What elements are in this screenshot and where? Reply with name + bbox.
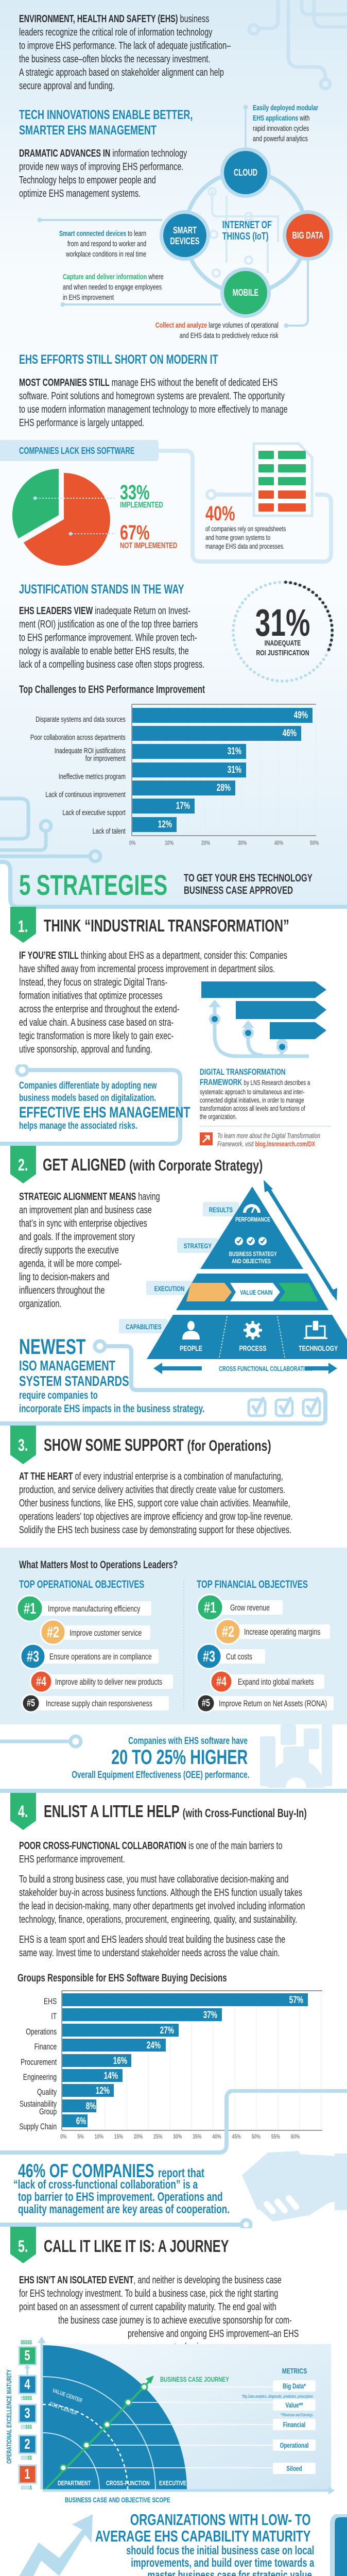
intro text: secure approval and funding.	[19, 80, 115, 92]
text: section 1: ed value chain. A business case based on stra-	[19, 1017, 173, 1028]
text: MOBILE	[233, 287, 258, 298]
text: CAPABILITIES	[126, 1323, 162, 1331]
text: 12%	[96, 2086, 110, 2096]
text: the lead in decision-making, many other departments get involved including information	[19, 1901, 305, 1912]
callout: big data: and EHS data to predictively reduce risk	[180, 331, 279, 340]
chart: business case journey: *Big Data analytics, diagnostic, predictive, prescriptive	[242, 2394, 313, 2399]
text: prehensive and ongoing EHS improvement–an EHS	[128, 2328, 299, 2340]
intro text: leaders recognize the critical role of information technology	[19, 27, 212, 38]
chart: business case journey: OPERATIONAL EXCELLENCE MATURITY	[5, 2369, 13, 2464]
intro text	[19, 13, 231, 92]
text: BIG DATA	[292, 230, 323, 241]
callout: OEE performance	[0, 1724, 347, 1793]
text: digital transformation framework: To learn more about the Digital Transformation	[217, 1132, 320, 1140]
diagram: technology circles	[37, 105, 333, 328]
text: 46%	[283, 728, 297, 739]
panel: what matters most to operations leaders: Grow revenue	[230, 1603, 270, 1613]
text: section 5: EHS ISN’T AN ISOLATED EVENT, and neither is developing the business case	[19, 2275, 282, 2286]
section 3 heading: SHOW SOME SUPPORT (for Operations)	[44, 1435, 271, 1454]
text: INADEQUATE	[265, 639, 301, 648]
callout: cloud: and powerful analytics	[253, 134, 308, 143]
text: THINGS (IoT)	[222, 231, 268, 242]
text: SMART	[173, 225, 197, 235]
text: IT	[51, 2011, 57, 2021]
text: EHS leaders view: to EHS performance improvement. While proven tech-	[19, 632, 197, 643]
callout: organizations with low maturity: should focus the initial business case on local	[126, 2544, 314, 2557]
text: manage EHS data and processes.	[205, 542, 285, 550]
callout: organizations with low maturity: ORGANIZATIONS WITH LOW- TO	[130, 2511, 311, 2529]
text: section 3: Solidify the EHS tech business case by demonstrating support for these objectives.	[19, 1524, 291, 1536]
section 5 heading: 5.	[18, 2237, 28, 2256]
title: 5 strategies	[19, 869, 313, 901]
panel: what matters most to operations leaders: Improve manufacturing efficiency	[48, 1604, 140, 1614]
text: section 1: across the enterprise and throughout the extend-	[19, 1004, 179, 1015]
bottom blue section background	[20, 2514, 347, 2576]
title: 5 strategies: 5 STRATEGIES	[19, 869, 167, 901]
callout: OEE performance: Overall Equipment Effectiveness (OEE) performance.	[72, 1770, 249, 1781]
text: 30%	[238, 839, 247, 846]
stat: 40% spreadsheets: 40%	[205, 502, 235, 525]
callout: organizations with low maturity: improvements, and build over time towards a	[131, 2556, 314, 2569]
text: most companies: MOST COMPANIES STILL manage EHS without the benefit of dedicated EHS	[19, 377, 277, 388]
stat: 33% implemented: 33%	[120, 481, 150, 504]
text: section 1: have shifted away from incremental process improvement in department silos.	[19, 963, 275, 975]
text: digital transformation framework: FRAMEWORK by LNS Research describes a	[200, 1077, 310, 1087]
text: digital transformation framework: transformation across all levels and functions of	[200, 1105, 305, 1112]
heading: tech innovations: TECH INNOVATIONS ENABLE BETTER,	[19, 108, 193, 122]
callout: cloud	[253, 104, 318, 143]
section 3 heading: 3.	[18, 1436, 28, 1454]
chart: business case journey: $$$$$	[21, 2395, 32, 2401]
text: 57%	[289, 1995, 303, 2006]
callout: smart devices: workplace conditions in real time	[66, 250, 146, 259]
chart: business case journey: 1	[24, 2466, 30, 2482]
callout: mobile: in EHS improvement	[63, 293, 114, 302]
text: DEVICES	[170, 236, 199, 246]
callout: cloud: EHS applications with	[253, 114, 309, 123]
text: digital transformation framework: connected digital initiatives, in order to manage	[200, 1096, 304, 1104]
text: Lack of continuous improvement	[46, 790, 126, 799]
text: EHS leaders view: nology is available to enable better EHS results, the	[19, 646, 189, 657]
stat: 67% not implemented: NOT IMPLEMENTED	[120, 541, 177, 550]
text: EHS is a team sport and EHS leaders should treat building the business case the	[19, 1934, 285, 1945]
callout: OEE performance: 20 TO 25% HIGHER	[111, 1746, 248, 1769]
chart: business case journey: 2	[24, 2436, 30, 2452]
chart: business case journey: EXECUTIVE	[159, 2479, 186, 2487]
text: 8%	[85, 2101, 96, 2112]
text: dramatic advances: Technology helps to empower people and	[19, 175, 156, 186]
text: Lack of talent	[93, 827, 126, 836]
callout: 46% of companies: “lack of cross-functional collaboration” is a	[13, 2178, 198, 2192]
chart: business case journey: BUSINESS CASE AND OBJECTIVE SCOPE	[65, 2496, 170, 2504]
text: section 3: AT THE HEART of every industrial enterprise is a combination of manufacturing,	[19, 1471, 283, 1482]
text: of companies rely on spreadsheets	[205, 524, 286, 533]
panel: what matters most to operations leaders: What Matters Most to Operations Leaders?	[19, 1559, 178, 1571]
chart title: top challenges: Top Challenges to EHS Performance Improvement	[19, 684, 205, 696]
chart: business case journey: Siloed	[286, 2464, 302, 2472]
panel: companies lack EHS software	[0, 440, 333, 566]
text: section 5	[19, 2275, 282, 2313]
text: PROCESS	[239, 1344, 266, 1353]
section 4 heading: 4.	[18, 1802, 28, 1821]
panel: what matters most to operations leaders: Expand into global markets	[238, 1677, 314, 1687]
text: Sustainability	[20, 2099, 57, 2109]
chart: business case journey: COST CENTER	[48, 2401, 78, 2417]
text: 31%	[255, 601, 310, 644]
text: section 2: and goals. If the improvement story	[19, 1231, 135, 1243]
text: section 4	[19, 1840, 283, 1865]
panel: what matters most to operations leaders: #5	[202, 1698, 210, 1709]
text: TECHNOLOGY	[299, 1344, 338, 1353]
panel: what matters most to operations leaders: Improve customer service	[70, 1628, 142, 1638]
chart: business case journey: $$$$$	[21, 2424, 32, 2430]
text: digital transformation framework: the organization.	[200, 1113, 237, 1121]
text: COMPANIES LACK EHS SOFTWARE	[19, 446, 134, 456]
text: 10%	[165, 839, 173, 846]
icon: transformation arrows	[201, 981, 326, 1058]
callout: ISO standards	[0, 1334, 327, 1426]
callout: ISO standards: SYSTEM STANDARDS	[19, 1373, 129, 1389]
icon: cloud circle	[220, 147, 271, 198]
callout: ISO standards: NEWEST	[19, 1334, 85, 1359]
text: PERFORMANCE	[235, 1216, 270, 1223]
text: 6%	[76, 2116, 86, 2127]
section 2 heading: GET ALIGNED (with Corporate Strategy)	[43, 1155, 263, 1174]
stat: 31% dotted circle	[232, 581, 334, 683]
callout: OEE performance: Companies with EHS software have	[128, 1736, 248, 1747]
icon: smart devices circle	[160, 210, 210, 261]
text: 17%	[176, 801, 190, 811]
section 1 heading: THINK “INDUSTRIAL TRANSFORMATION”	[44, 916, 289, 935]
callout: big data: Collect and analyze large volumes of operational	[155, 321, 279, 330]
panel: what matters most to operations leaders: #1	[204, 1599, 216, 1616]
panel: what matters most to operations leaders: #1	[24, 1600, 36, 1617]
text: 14%	[104, 2071, 118, 2081]
callout: organizations with low maturity: AVERAGE EHS CAPABILITY MATURITY	[95, 2527, 311, 2545]
chart: business case journey: 3	[24, 2405, 30, 2421]
bar chart: top challenges	[131, 704, 316, 836]
text: dramatic advances: optimize EHS management systems.	[19, 188, 141, 199]
text: 31%	[228, 746, 241, 757]
callout: ISO standards: incorporate EHS impacts in the business strategy.	[19, 1403, 204, 1415]
chart: business case journey: 5	[24, 2347, 30, 2363]
callout: smart devices	[59, 229, 146, 259]
text: EHS leaders view: lack of a compelling business case often stops progress.	[19, 659, 204, 670]
text: section 2: STRATEGIC ALIGNMENT MEANS having	[19, 1191, 160, 1202]
callout: 46% of companies	[0, 2089, 347, 2228]
section 4 heading: ENLIST A LITTLE HELP (with Cross-Functional Buy-In)	[44, 1802, 307, 1821]
section 5 heading: CALL IT LIKE IT IS: A JOURNEY	[44, 2236, 229, 2256]
text: section 5: point based on an assessment of current capability maturity. The end goal with	[19, 2301, 276, 2313]
chart: business case journey: Operational	[280, 2441, 309, 2449]
text: section 1: IF YOU’RE STILL thinking about EHS as a department, consider this: Companies	[19, 950, 287, 961]
panel: what matters most to operations leaders: #3	[203, 1648, 215, 1665]
text: for improvement	[85, 754, 126, 763]
heading: EHS efforts: EHS EFFORTS STILL SHORT ON MODERN IT	[19, 352, 218, 367]
section 1 heading: 1.	[18, 917, 28, 936]
stat: 33% implemented: IMPLEMENTED	[120, 501, 163, 510]
chart: business case journey: Financial	[283, 2420, 305, 2429]
callout: ISO standards: require companies to	[19, 1389, 98, 1401]
text: section 2: that’s in sync with enterprise objectives	[19, 1218, 147, 1229]
panel: what matters most to operations leaders: Increase operating margins	[244, 1627, 320, 1637]
text: 20%	[201, 839, 210, 846]
heading: tech innovations: SMARTER EHS MANAGEMENT	[19, 123, 157, 138]
text: section 3: production, and service delivery activities that directly create value for customers.	[19, 1484, 285, 1496]
intro text: ENVIRONMENT, HEALTH AND SAFETY (EHS) business	[19, 13, 209, 25]
chart title: groups responsible: Groups Responsible for EHS Software Buying Decisions	[18, 1972, 227, 1984]
text: Operations	[26, 2027, 57, 2037]
text: dramatic advances: DRAMATIC ADVANCES IN information technology	[19, 148, 187, 159]
text: Engineering	[23, 2072, 57, 2082]
text: section 3: Other business functions, like EHS, support core value chain activities. Meanwhile,	[19, 1498, 290, 1509]
stat: 67% not implemented: 67%	[120, 521, 150, 544]
panel: what matters most to operations leaders: TOP OPERATIONAL OBJECTIVES	[19, 1579, 144, 1590]
text: STRATEGY	[184, 1242, 212, 1250]
panel: what matters most to operations leaders: Improve Return on Net Assets (RONA)	[219, 1699, 327, 1708]
text: section 1: utive sponsorship, approval and funding.	[19, 1044, 152, 1055]
text: 24%	[147, 2040, 161, 2051]
chart: business case journey: VALUE CENTER	[51, 2387, 83, 2404]
text: EHS leaders view: ment (ROI) justification as one of the top three barriers	[19, 619, 198, 630]
callout: big data	[155, 321, 279, 340]
text: EXECUTION	[154, 1284, 184, 1293]
intro text: A strategic approach based on stakeholder alignment can help	[19, 67, 224, 78]
text: 37%	[203, 2010, 217, 2021]
text: AND OBJECTIVES	[232, 1258, 271, 1265]
text: section 1	[19, 950, 287, 1055]
panel: what matters most to operations leaders: Cut costs	[226, 1652, 252, 1662]
text: 0%	[129, 839, 135, 846]
panel: what matters most to operations leaders: Increase supply chain responsiveness	[46, 1699, 152, 1708]
panel: what matters most to operations leaders: #5	[27, 1698, 35, 1709]
callout: mobile: Capture and deliver information where	[63, 273, 164, 281]
text: digital transformation framework	[200, 1067, 331, 1148]
text: 0% 5% 10% 15% 20% 25% 30% 35% 40% 45% 50% 55% 60%	[60, 2133, 300, 2140]
text: Procurement	[21, 2057, 57, 2067]
callout: 46% of companies: top barrier to EHS improvement. Operations and	[18, 2190, 223, 2204]
text: BUSINESS STRATEGY	[229, 1250, 277, 1258]
callout: 46% of companies: 46% OF COMPANIES report that	[18, 2160, 204, 2181]
text: PEOPLE	[180, 1344, 202, 1353]
chart: business case journey: $$$$$	[21, 2485, 32, 2491]
title: 5 strategies: BUSINESS CASE APPROVED	[184, 885, 293, 896]
panel: what matters most to operations leaders: #4	[216, 1674, 227, 1689]
callout: digitalization: EFFECTIVE EHS MANAGEMENT	[19, 1104, 190, 1121]
callout: smart devices: from and respond to worker and	[67, 240, 146, 248]
text: 40%	[274, 839, 283, 846]
chart: business case journey: Big Data*	[283, 2382, 306, 2390]
section 2 heading: 2.	[18, 1156, 28, 1174]
panel: what matters most to operations leaders: TOP FINANCIAL OBJECTIVES	[197, 1579, 308, 1590]
callout: digitalization	[0, 1064, 190, 1146]
callout: 46% of companies: quality management are key areas of cooperation.	[18, 2202, 230, 2216]
text: EHS leaders view	[19, 605, 204, 670]
callout: digitalization: helps manage the associated risks.	[19, 1121, 137, 1131]
text: digital transformation framework: systematic approach to simultaneous and inter-	[200, 1088, 305, 1096]
text: RESULTS	[209, 1206, 233, 1214]
text: section 2: organization.	[19, 1298, 61, 1310]
panel: what matters most to operations leaders: #2	[222, 1623, 234, 1640]
chart: business case journey: $$$$$	[21, 2455, 32, 2461]
text: most companies: to use modern information management technology to more effectively to manage	[19, 404, 288, 415]
text: section 2	[19, 1191, 160, 1310]
text: section 1: formation initiatives that optimize processes	[19, 990, 163, 1002]
callout: cloud: Easily deployed modular	[253, 104, 318, 112]
text: section 5: for EHS technology investment. To build a business case, pick the right starting	[19, 2288, 278, 2299]
chart: business case journey: **Revenue and Earnings	[281, 2413, 313, 2417]
chart: business case journey	[5, 2336, 335, 2504]
chart: business case journey: 4	[24, 2376, 30, 2392]
chart: business case journey: METRICS	[282, 2367, 307, 2376]
callout: organizations with low maturity	[95, 2511, 314, 2576]
text: EHS leaders view: EHS LEADERS VIEW inadequate Return on Invest-	[19, 605, 190, 617]
intro text: the business case–often blocks the necessary investment.	[19, 54, 210, 65]
callout: mobile	[63, 273, 164, 302]
text: digital transformation framework: Framework, visit blog.lnsresearch.com/DX	[217, 1140, 315, 1148]
text: section 3	[19, 1471, 293, 1536]
text: section 1: Instead, they focus on strategic Digital Trans-	[19, 977, 167, 988]
text: and home grown systems to	[205, 533, 270, 541]
text: section 2: ling to decision-makers and	[19, 1272, 109, 1283]
text: Lack of executive support	[63, 808, 126, 817]
callout: cloud: rapid innovation cycles	[253, 124, 309, 133]
chart: business case journey: Value**	[285, 2401, 303, 2409]
stat: 67% not implemented	[120, 521, 177, 550]
text: Finance	[34, 2042, 57, 2052]
text: 31%	[228, 765, 241, 775]
callout: digitalization: business models based on digitalization.	[19, 1093, 156, 1104]
text: section 4: EHS performance improvement.	[19, 1854, 125, 1865]
callout: smart devices: Smart connected devices to learn	[59, 229, 146, 238]
callout: ISO standards: ISO MANAGEMENT	[19, 1358, 115, 1374]
text: CLOUD	[234, 167, 257, 178]
text: most companies: EHS performance is largely untapped.	[19, 417, 144, 429]
title: 5 strategies: TO GET YOUR EHS TECHNOLOGY	[184, 872, 313, 884]
text: section 4: POOR CROSS-FUNCTIONAL COLLABORATION is one of the main barriers to	[19, 1840, 283, 1852]
text: dramatic advances: provide new ways of improving EHS performance.	[19, 161, 183, 173]
text: master business case.	[160, 2342, 234, 2353]
text: Supply Chain	[19, 2122, 57, 2131]
text: Disparate systems and data sources	[36, 715, 126, 724]
panel: what matters most to operations leaders: Ensure operations are in compliance	[49, 1652, 152, 1662]
callout: mobile: and when needed to engage employees	[63, 283, 162, 292]
intro text: to improve EHS performance. The lack of adequate justification–	[19, 40, 231, 52]
text: 50%	[310, 839, 319, 846]
text: Group	[39, 2107, 57, 2116]
text: same way. Invest time to understand stakeholder needs across the value chain.	[19, 1947, 280, 1959]
text: ROI JUSTIFICATION	[256, 649, 309, 657]
text: section 2: an improvement plan and business case	[19, 1205, 152, 1216]
text: most companies: software. Point solutions and homegrown systems are prevalent. The opportunity	[19, 391, 285, 402]
callout: digitalization: Companies differentiate by adopting new	[19, 1080, 157, 1091]
stat: 33% implemented	[120, 481, 163, 510]
icon: big data circle	[283, 210, 333, 261]
text: INTERNET OF	[222, 219, 272, 231]
text: CROSS FUNCTIONAL COLLABORATION	[219, 1365, 312, 1372]
chart: business case journey: $$$$$	[21, 2340, 32, 2346]
heading: justification: JUSTIFICATION STANDS IN THE WAY	[19, 582, 184, 597]
text: technology, finance, operations, procurement, engineering, quality, and sustainability.	[19, 1914, 297, 1925]
text: 12%	[158, 819, 172, 830]
text: section 2: influencers throughout the	[19, 1285, 105, 1296]
text: Inadequate ROI justifications	[55, 747, 126, 755]
chart: business case journey: BUSINESS CASE JOURNEY	[160, 2375, 229, 2383]
panel: what matters most to operations leaders: #4	[36, 1674, 46, 1689]
panel: what matters most to operations leaders	[0, 1548, 347, 1724]
icon: external link	[200, 1132, 213, 1145]
heading: tech innovations	[19, 108, 193, 138]
text: 28%	[217, 783, 231, 793]
text: the business case journey is to achieve executive sponsorship for com-	[58, 2315, 292, 2326]
text: 27%	[160, 2025, 174, 2036]
text: VALUE CHAIN	[240, 1289, 272, 1296]
text: section 2: directly supports the executive	[19, 1245, 119, 1256]
diagram: alignment pyramid	[119, 1180, 347, 1374]
bar chart: groups responsible	[61, 1990, 322, 2131]
text: EHS	[44, 1996, 57, 2006]
text: 49%	[294, 710, 308, 721]
text: To build a strong business case, you must have collaborative decision-making and	[19, 1874, 288, 1885]
panel: what matters most to operations leaders: #2	[47, 1624, 59, 1641]
text: Quality	[37, 2087, 57, 2097]
panel: what matters most to operations leaders: Improve ability to deliver new products	[55, 1677, 162, 1687]
chart: business case journey: CROSS-FUNCTION	[106, 2479, 150, 2487]
text: Ineffective metrics program	[59, 772, 126, 781]
text: digital transformation framework: DIGITAL TRANSFORMATION	[200, 1067, 286, 1077]
text: section 2: agenda, it will be more compel-	[19, 1258, 122, 1269]
text: section 3: operations leaders' top objectives are improve efficiency and grow top-line revenue.	[19, 1511, 293, 1522]
text: Poor collaboration across departments	[30, 733, 126, 742]
text: stakeholder buy-in across business functions. Although the EHS function usually takes	[19, 1887, 302, 1899]
text: section 1: tegic transformation is more likely to gain exec-	[19, 1030, 173, 1042]
chart: business case journey: DEPARTMENT	[58, 2479, 91, 2487]
text: most companies	[19, 377, 288, 429]
text: dramatic advances	[19, 148, 187, 199]
panel: what matters most to operations leaders: #3	[27, 1648, 39, 1665]
icon: mobile circle	[220, 267, 271, 318]
text: 16%	[113, 2056, 127, 2066]
